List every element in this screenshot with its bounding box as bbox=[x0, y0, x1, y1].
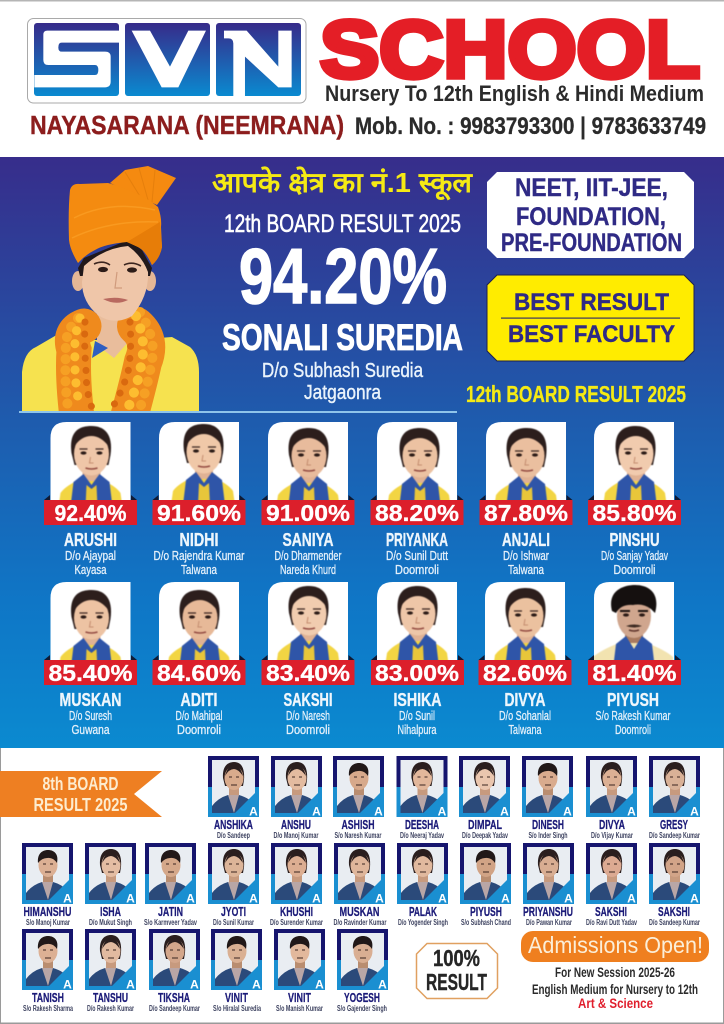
student: Pinshu bbox=[588, 422, 681, 577]
8th row 3: Vinit (Manish): S/o Manish Kumar bbox=[276, 1004, 323, 1013]
8th row 3: Yogesh: YOGESH bbox=[344, 990, 380, 1005]
8th row 1: Dimpal: A bbox=[500, 804, 509, 818]
8th row 3: Vinit (Manish): A bbox=[315, 978, 324, 992]
school name: SCHOOL bbox=[320, 3, 700, 95]
student: Sakshi: SAKSHI bbox=[284, 690, 332, 710]
student: Muskan: Guwana bbox=[72, 722, 110, 737]
student: Arushi: Kayasa bbox=[74, 562, 107, 577]
8th row 1: Dinesh: S/o Inder Singh bbox=[528, 831, 568, 840]
badge: 100% result: 100% bbox=[433, 945, 480, 971]
8th row 2: Isha: A bbox=[126, 892, 135, 906]
8th row 1: Anshu: ANSHU bbox=[281, 817, 311, 832]
8th row 1: Divya: A bbox=[627, 804, 636, 818]
8th row 2: Khushi: D/o Surender Kumar bbox=[270, 918, 323, 927]
8th row 3: Tanshu: TANSHU bbox=[93, 990, 128, 1005]
8th row 2: Sakshi: SAKSHI bbox=[595, 904, 627, 919]
student: Nidhi bbox=[152, 422, 246, 577]
8th row 1: Gresy: A bbox=[690, 804, 699, 818]
student: Sakshi: Doomroli bbox=[286, 722, 330, 737]
student: Aditi bbox=[152, 582, 246, 737]
8th row 2: Priyanshu: PRIYANSHU bbox=[523, 904, 573, 919]
8th row 1: Dimpal bbox=[459, 756, 510, 840]
8th row 1: Dinesh: A bbox=[563, 804, 572, 818]
student: Aditi: D/o Mahipal bbox=[176, 708, 223, 723]
student: Piyush: PIYUSH bbox=[607, 690, 659, 710]
8th row 2: Isha: ISHA bbox=[100, 904, 121, 919]
8th row 3: Tanshu: A bbox=[126, 978, 135, 992]
8th row 2: Piyush bbox=[460, 843, 511, 927]
banner: 8th board result bbox=[0, 771, 162, 817]
8th row 1: Deesha: A bbox=[438, 804, 447, 818]
badge: 100% result: RESULT bbox=[426, 969, 487, 995]
8th row 2: Piyush: A bbox=[501, 892, 510, 906]
hero parent: D/o Subhash Suredia bbox=[262, 360, 424, 382]
student: Priyanka: D/o Sunil Dutt bbox=[386, 548, 448, 563]
8th row 2: Jatin: A bbox=[186, 892, 195, 906]
hero result heading: 12th BOARD RESULT 2025 bbox=[224, 210, 461, 238]
8th row 1: Anshika: ANSHIKA bbox=[214, 817, 253, 832]
8th row 3: Tanish: A bbox=[63, 978, 72, 992]
courses box bbox=[487, 172, 694, 258]
8th row 2: Himanshu: S/o Manoj Kumar bbox=[26, 918, 70, 927]
8th row 1: Anshu bbox=[271, 756, 322, 840]
8th row 2: Piyush: S/o Subhash Chand bbox=[461, 918, 511, 927]
8th row 2: Piyush: PIYUSH bbox=[470, 904, 502, 919]
8th row 1: Ashish: ASHISH bbox=[342, 817, 374, 832]
admissions details: For New Session 2025-26 bbox=[555, 965, 675, 980]
8th row 1: Deesha: D/o Neeraj Yadav bbox=[400, 831, 444, 840]
8th row 3: Vinit (Hiralal): S/o Hiralal Suredia bbox=[213, 1004, 261, 1013]
student: Anjali: 87.80% bbox=[484, 500, 568, 526]
8th row 2: Priyanshu bbox=[523, 843, 574, 927]
8th row 1: Anshika: A bbox=[249, 804, 258, 818]
8th row 2: Sakshi (Sandeep): SAKSHI bbox=[658, 904, 690, 919]
8th row 2: Jyoti: JYOTI bbox=[221, 904, 246, 919]
student: Ishika: Nihalpura bbox=[398, 722, 437, 737]
8th row 3: Vinit (Manish) bbox=[274, 929, 325, 1013]
8th row 2: Jatin bbox=[144, 843, 197, 927]
student: Arushi bbox=[44, 422, 137, 577]
student: Arushi: D/o Ajaypal bbox=[65, 548, 116, 563]
8th row 3: Tanish: TANISH bbox=[32, 990, 64, 1005]
8th row 2: Jyoti bbox=[208, 843, 259, 927]
8th row 1: Anshika bbox=[208, 756, 259, 840]
banner: 8th board result: 8th BOARD bbox=[42, 774, 118, 794]
student: Anjali bbox=[480, 422, 572, 577]
student: Aditi: Doomroli bbox=[177, 722, 221, 737]
8th row 3: Vinit (Hiralal): VINIT bbox=[225, 990, 248, 1005]
student: Arushi: 92.40% bbox=[54, 500, 126, 526]
8th row 1: Gresy bbox=[649, 756, 700, 840]
8th row 3: Yogesh: A bbox=[378, 978, 387, 992]
student: Saniya bbox=[262, 422, 354, 577]
hero village: Jatgaonra bbox=[304, 382, 382, 404]
student: Nidhi: D/o Rajendra Kumar bbox=[154, 548, 245, 563]
8th row 1: Anshu: D/o Manoj Kumar bbox=[274, 831, 318, 840]
8th row 3: Tiksha: A bbox=[190, 978, 199, 992]
8th row 2: Khushi bbox=[270, 843, 323, 927]
location: NAYASARANA (NEEMRANA) bbox=[30, 110, 344, 140]
8th row 2: Muskan: MUSKAN bbox=[340, 904, 380, 919]
hero percentage: 94.20% bbox=[239, 232, 447, 320]
student: Muskan: 85.40% bbox=[48, 660, 132, 686]
student: Piyush: 81.40% bbox=[592, 660, 676, 686]
8th row 2: Khushi: KHUSHI bbox=[280, 904, 313, 919]
student: Pinshu: PINSHU bbox=[610, 530, 660, 550]
banner: 8th board result: RESULT 2025 bbox=[34, 795, 128, 815]
best result box bbox=[487, 275, 694, 361]
student: Pinshu: D/o Sanjay Yadav bbox=[601, 548, 668, 563]
headline: Hindi: आपके क्षेत्र का नं.1 स्कूल bbox=[212, 166, 473, 201]
best result box: BEST FACULTY bbox=[508, 321, 675, 348]
8th row 2: Sakshi: D/o Ravi Dutt Yadav bbox=[586, 918, 637, 927]
8th row 1: Dinesh bbox=[522, 756, 573, 840]
8th row 2: Jyoti: A bbox=[249, 892, 258, 906]
student: Priyanka: Doomroli bbox=[395, 562, 439, 577]
8th row 1: Divya: DIVYA bbox=[599, 817, 625, 832]
header panel bbox=[0, 0, 724, 157]
blue results panel bbox=[0, 157, 724, 748]
8th row 1: Divya bbox=[586, 756, 637, 840]
8th row 1: Dinesh: DINESH bbox=[532, 817, 564, 832]
student: Priyanka: PRIYANKA bbox=[386, 530, 448, 550]
8th row 3: Yogesh bbox=[337, 929, 388, 1013]
8th row 2: Sakshi (Sandeep) bbox=[649, 843, 700, 927]
8th row 2: Jatin: JATIN bbox=[158, 904, 183, 919]
student: Priyanka bbox=[370, 422, 464, 577]
student: Anjali: D/o Ishwar bbox=[503, 548, 549, 563]
8th row 3: Vinit (Hiralal): A bbox=[252, 978, 261, 992]
8th row 3: Tiksha: D/o Sandeep Kumar bbox=[149, 1004, 200, 1013]
student: Anjali: Talwana bbox=[508, 562, 545, 577]
student: Arushi: ARUSHI bbox=[64, 530, 117, 550]
8th row 1: Anshu: A bbox=[312, 804, 321, 818]
8th row 2: Palak: A bbox=[438, 892, 447, 906]
8th row 2: Muskan: A bbox=[375, 892, 384, 906]
bottom white panel bbox=[0, 748, 724, 1024]
8th row 2: Jatin: S/o Karmveer Yadav bbox=[144, 918, 197, 927]
8th row 2: Sakshi bbox=[586, 843, 637, 927]
student: Ishika: D/o Sunil bbox=[399, 708, 435, 723]
8th row 2: Isha: D/o Mukut Singh bbox=[89, 918, 132, 927]
student: Saniya: Nareda Khurd bbox=[280, 562, 336, 577]
8th row 3: Tanish bbox=[22, 929, 73, 1013]
8th row 1: Deesha: DEESHA bbox=[405, 817, 439, 832]
8th row 2: Sakshi: A bbox=[627, 892, 636, 906]
8th row 3: Yogesh: S/o Gajender Singh bbox=[337, 1004, 387, 1013]
8th row 2: Priyanshu: D/o Pawan Kumar bbox=[526, 918, 572, 927]
student: Divya: D/o Sohanlal bbox=[499, 708, 551, 723]
student: Muskan bbox=[44, 582, 137, 737]
student: Aditi: ADITI bbox=[180, 690, 218, 710]
student: Nidhi: Talwana bbox=[181, 562, 218, 577]
student: Sakshi bbox=[262, 582, 354, 737]
8th row 1: Ashish bbox=[333, 756, 384, 840]
student: Pinshu: Doomroli bbox=[614, 562, 656, 577]
8th row 3: Tanish: S/o Rakesh Sharma bbox=[23, 1004, 73, 1013]
student: Muskan: D/o Suresh bbox=[69, 708, 112, 723]
8th row 2: Himanshu bbox=[22, 843, 73, 927]
admissions open pill: Admissions Open! bbox=[528, 932, 703, 958]
student: Nidhi: 91.60% bbox=[157, 500, 241, 526]
student: Sakshi: 83.40% bbox=[266, 660, 350, 686]
8th row 3: Tiksha bbox=[149, 929, 200, 1013]
student: Divya: DIVYA bbox=[504, 690, 546, 710]
8th row 2: Palak: D/o Yogender Singh bbox=[398, 918, 448, 927]
student: Saniya: D/o Dharmender bbox=[274, 548, 342, 563]
8th row 1: Gresy: D/o Sandeep Kumar bbox=[649, 831, 700, 840]
8th row 2: Sakshi (Sandeep): A bbox=[690, 892, 699, 906]
student: Aditi: 84.60% bbox=[157, 660, 241, 686]
8th row 1: Dimpal: DIMPAL bbox=[468, 817, 502, 832]
student: Ishika bbox=[371, 582, 464, 737]
badge: 100% result bbox=[416, 944, 498, 998]
courses box: FOUNDATION, bbox=[516, 203, 666, 231]
8th row 1: Ashish: S/o Naresh Kumar bbox=[334, 831, 382, 840]
hero portrait: Sonali bbox=[22, 166, 199, 425]
student: Priyanka: 88.20% bbox=[375, 500, 459, 526]
admissions details bbox=[532, 965, 698, 1011]
8th row 3: Tiksha: TIKSHA bbox=[158, 990, 190, 1005]
8th row 1: Anshika: D/o Sandeep bbox=[217, 831, 250, 840]
courses box: NEET, IIT-JEE, bbox=[515, 174, 668, 202]
8th row 1: Gresy: GRESY bbox=[660, 817, 688, 832]
student: Divya: Talwana bbox=[508, 722, 542, 737]
8th row 2: Himanshu: HIMANSHU bbox=[24, 904, 72, 919]
student: Sakshi: D/o Naresh bbox=[286, 708, 330, 723]
8th row 2: Jyoti: D/o Sunil Kumar bbox=[213, 918, 254, 927]
8th row 2: Muskan: D/o Ravinder Kumar bbox=[334, 918, 386, 927]
student: Anjali: ANJALI bbox=[502, 530, 550, 550]
hero divider line bbox=[19, 411, 457, 413]
8th row 3: Vinit (Manish): VINIT bbox=[288, 990, 311, 1005]
student: Ishika: 83.00% bbox=[375, 660, 459, 686]
8th row 2: Palak: PALAK bbox=[409, 904, 437, 919]
student: Piyush: S/o Rakesh Kumar bbox=[596, 708, 671, 723]
hero name: SONALI SUREDIA bbox=[222, 317, 463, 358]
8th row 1: Deesha bbox=[396, 756, 448, 840]
8th row 1: Divya: D/o Vijay Kumar bbox=[591, 831, 633, 840]
logo: SVN bbox=[28, 18, 306, 103]
student: Divya bbox=[478, 582, 572, 737]
8th row 2: Sakshi (Sandeep): D/o Sandeep Kumar bbox=[649, 918, 700, 927]
admissions details: Art & Science bbox=[578, 996, 653, 1011]
8th row 3: Tanshu: D/o Rakesh Kumar bbox=[87, 1004, 134, 1013]
8th row 1: Dimpal: D/o Deepak Yadav bbox=[462, 831, 508, 840]
student: Divya: 82.60% bbox=[483, 660, 567, 686]
courses box: PRE-FOUNDATION bbox=[501, 229, 682, 257]
8th row 1: Ashish: A bbox=[374, 804, 383, 818]
student: Piyush: Doomroli bbox=[615, 722, 651, 737]
8th row 2: Muskan bbox=[334, 843, 386, 927]
8th row 2: Priyanshu: A bbox=[564, 892, 573, 906]
8th row 2: Palak bbox=[397, 843, 448, 927]
8th row 2: Isha bbox=[85, 843, 136, 927]
8th row 3: Vinit (Hiralal) bbox=[211, 929, 262, 1013]
8th row 3: Tanshu bbox=[85, 929, 136, 1013]
student: Nidhi: NIDHI bbox=[180, 530, 218, 550]
best result box: BEST RESULT bbox=[514, 289, 669, 316]
student: Ishika: ISHIKA bbox=[394, 690, 442, 710]
student: Piyush bbox=[588, 582, 681, 737]
student: Muskan: MUSKAN bbox=[60, 690, 122, 710]
student: Saniya: SANIYA bbox=[282, 530, 334, 550]
student: Pinshu: 85.80% bbox=[592, 500, 676, 526]
8th row 2: Himanshu: A bbox=[63, 892, 72, 906]
8th row 2: Khushi: A bbox=[312, 892, 321, 906]
student: Saniya: 91.00% bbox=[266, 500, 350, 526]
